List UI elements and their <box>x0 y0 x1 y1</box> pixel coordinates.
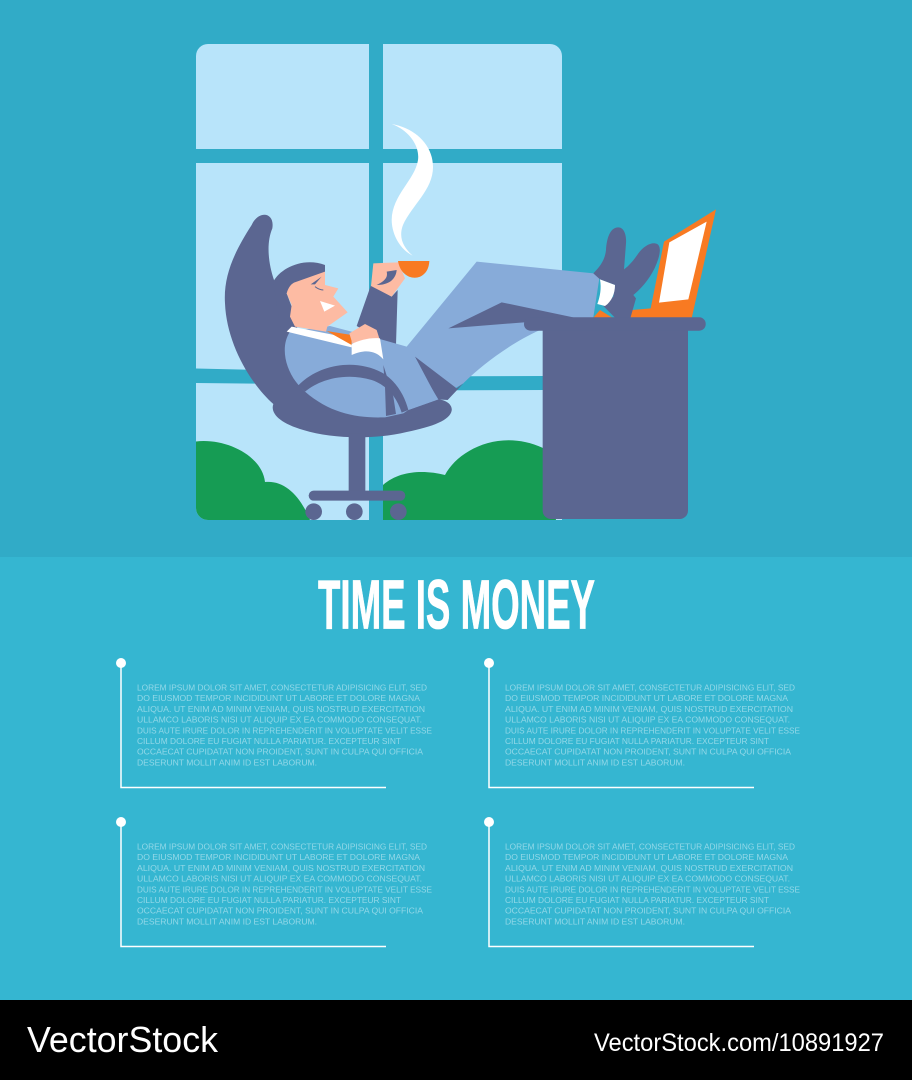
footer bar <box>0 1000 912 1080</box>
text block: top left: DUIS AUTE IRURE DOLOR IN REPREHENDERIT IN VOLUPTATE VELIT ESSE <box>137 725 432 735</box>
text block: bottom right <box>484 817 800 946</box>
leg shadow notch <box>448 302 573 328</box>
text block: top right: DESERUNT MOLLIT ANIM ID EST LABORUM. <box>505 757 685 767</box>
text block: top left: CILLUM DOLORE EU FUGIAT NULLA PARIATUR. EXCEPTEUR SINT <box>137 736 401 746</box>
shirt cuff <box>352 338 383 359</box>
thumb <box>377 270 397 285</box>
closed eye <box>315 287 323 290</box>
text block: bottom left: DESERUNT MOLLIT ANIM ID EST LABORUM. <box>137 916 317 926</box>
laptop <box>593 209 716 318</box>
text block: top right: DO EIUSMOD TEMPOR INCIDIDUNT UT LABORE ET DOLORE MAGNA <box>505 693 788 703</box>
text block: bottom left: ULLAMCO LABORIS NISI UT ALIQUIP EX EA COMMODO CONSEQUAT. <box>137 874 422 884</box>
raised forearm <box>357 285 398 345</box>
text block: bottom left: LOREM IPSUM DOLOR SIT AMET, CONSECTETUR ADIPISICING ELIT, SED <box>137 842 427 852</box>
title: TIME IS MONEY <box>318 566 595 644</box>
tie <box>327 331 352 345</box>
shirt collar <box>287 327 352 347</box>
text block: bottom right: ULLAMCO LABORIS NISI UT ALIQUIP EX EA COMMODO CONSEQUAT. <box>505 874 790 884</box>
text block: top right <box>484 658 800 788</box>
hand holding cup <box>371 262 405 297</box>
coffee cup <box>398 261 429 278</box>
text block: bottom left: CILLUM DOLORE EU FUGIAT NULLA PARIATUR. EXCEPTEUR SINT <box>137 895 401 905</box>
text block: top left <box>116 658 432 788</box>
text block: bottom right: CILLUM DOLORE EU FUGIAT NULLA PARIATUR. EXCEPTEUR SINT <box>505 895 769 905</box>
text block: top right: ALIQUA. UT ENIM AD MINIM VENIAM, QUIS NOSTRUD EXERCITATION <box>505 704 793 714</box>
text block: top right: CILLUM DOLORE EU FUGIAT NULLA PARIATUR. EXCEPTEUR SINT <box>505 736 769 746</box>
smile <box>320 301 335 312</box>
text block: top left: DESERUNT MOLLIT ANIM ID EST LABORUM. <box>137 757 317 767</box>
text block: top right: OCCAECAT CUPIDATAT NON PROIDENT, SUNT IN CULPA QUI OFFICIA <box>505 747 791 757</box>
text block: top left: DO EIUSMOD TEMPOR INCIDIDUNT UT LABORE ET DOLORE MAGNA <box>137 693 420 703</box>
text block: top right: LOREM IPSUM DOLOR SIT AMET, CONSECTETUR ADIPISICING ELIT, SED <box>505 682 795 692</box>
text block: bottom left: ALIQUA. UT ENIM AD MINIM VENIAM, QUIS NOSTRUD EXERCITATION <box>137 863 425 873</box>
text block: top left: ALIQUA. UT ENIM AD MINIM VENIAM, QUIS NOSTRUD EXERCITATION <box>137 704 425 714</box>
text block: bottom right: OCCAECAT CUPIDATAT NON PROIDENT, SUNT IN CULPA QUI OFFICIA <box>505 906 791 916</box>
text block: top right: DUIS AUTE IRURE DOLOR IN REPREHENDERIT IN VOLUPTATE VELIT ESSE <box>505 725 800 735</box>
chair back and seat <box>225 215 452 520</box>
illustration: relaxed businessman in chair <box>225 215 600 520</box>
text block: bottom right: DESERUNT MOLLIT ANIM ID EST LABORUM. <box>505 916 685 926</box>
text block: bottom left: DO EIUSMOD TEMPOR INCIDIDUNT UT LABORE ET DOLORE MAGNA <box>137 852 420 862</box>
text block: bottom right: ALIQUA. UT ENIM AD MINIM VENIAM, QUIS NOSTRUD EXERCITATION <box>505 863 793 873</box>
text block: bottom right: LOREM IPSUM DOLOR SIT AMET, CONSECTETUR ADIPISICING ELIT, SED <box>505 842 795 852</box>
text block: top left: OCCAECAT CUPIDATAT NON PROIDENT, SUNT IN CULPA QUI OFFICIA <box>137 747 423 757</box>
knee shadow <box>415 357 463 400</box>
text block: top right: ULLAMCO LABORIS NISI UT ALIQUIP EX EA COMMODO CONSEQUAT. <box>505 715 790 725</box>
panel: window with panes <box>196 44 722 523</box>
resting hand <box>349 324 381 343</box>
hair <box>273 262 325 332</box>
footer bar: VectorStock.com/10891927 <box>594 1029 884 1057</box>
text block: bottom left: OCCAECAT CUPIDATAT NON PROIDENT, SUNT IN CULPA QUI OFFICIA <box>137 906 423 916</box>
eyebrow <box>311 277 322 284</box>
raised leg <box>390 262 600 410</box>
chair arm rest <box>298 365 408 413</box>
jacket <box>285 326 438 417</box>
text block: bottom right: DO EIUSMOD TEMPOR INCIDIDUNT UT LABORE ET DOLORE MAGNA <box>505 852 788 862</box>
text block: bottom left: DUIS AUTE IRURE DOLOR IN REPREHENDERIT IN VOLUPTATE VELIT ESSE <box>137 884 432 894</box>
desk <box>543 327 688 519</box>
face <box>287 272 348 332</box>
footer bar: VectorStock <box>27 1019 219 1060</box>
desk top <box>524 317 706 331</box>
shoes and sock <box>593 227 660 319</box>
icon: green bushes <box>196 440 556 520</box>
text block: bottom left <box>116 817 432 946</box>
text block: top left: LOREM IPSUM DOLOR SIT AMET, CONSECTETUR ADIPISICING ELIT, SED <box>137 682 427 692</box>
icon: steam from the cup <box>392 124 433 256</box>
text block: bottom right: DUIS AUTE IRURE DOLOR IN REPREHENDERIT IN VOLUPTATE VELIT ESSE <box>505 884 800 894</box>
jacket fold <box>383 365 396 416</box>
text block: top left: ULLAMCO LABORIS NISI UT ALIQUIP EX EA COMMODO CONSEQUAT. <box>137 715 422 725</box>
